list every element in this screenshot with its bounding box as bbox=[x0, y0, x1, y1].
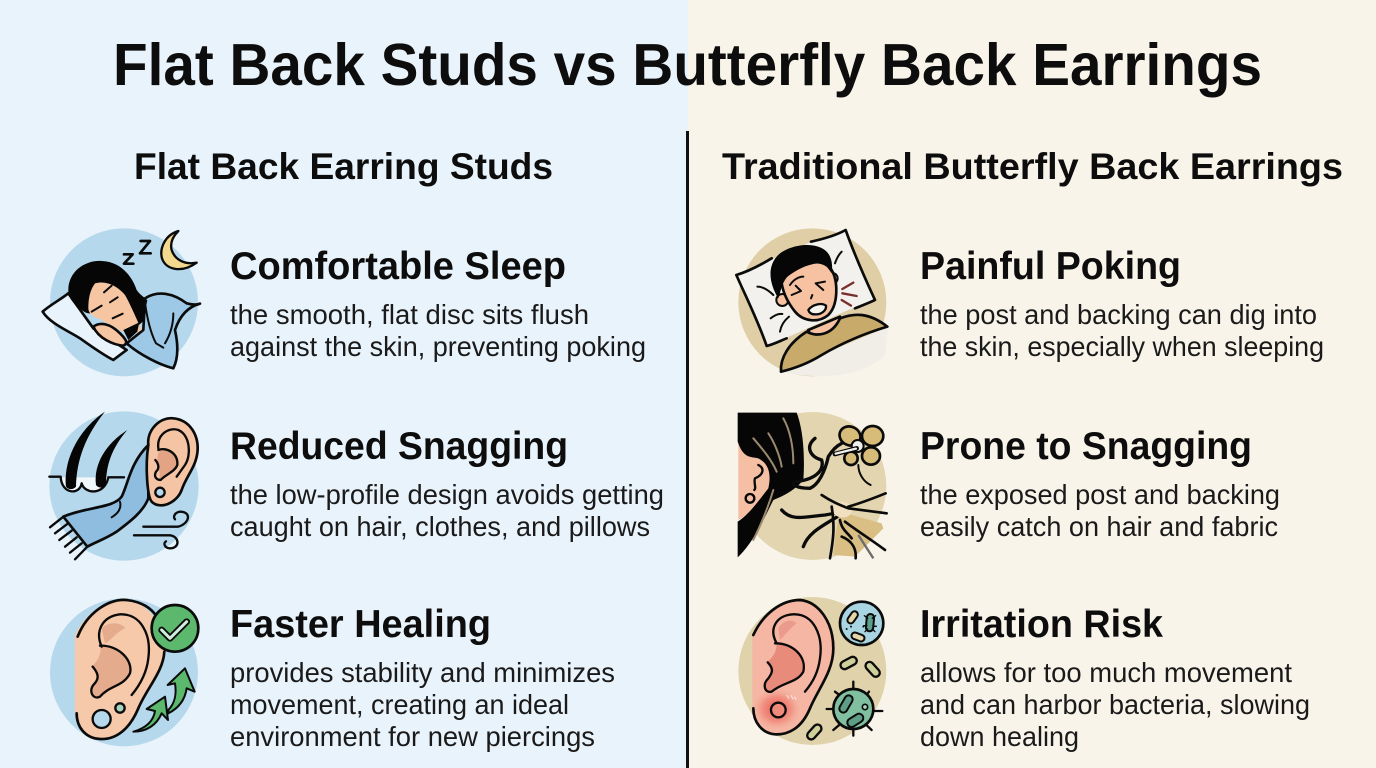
icon: sleeping person with moon bbox=[43, 228, 200, 376]
heading: prone to snagging: Prone to Snagging bbox=[920, 425, 1252, 468]
description: reduced snagging bbox=[230, 479, 664, 542]
description: irritation risk: down healing bbox=[920, 721, 1079, 752]
panel: comfortable sleep bbox=[43, 228, 646, 376]
icon: hair caught on butterfly back bbox=[738, 412, 887, 560]
heading: irritation risk: Irritation Risk bbox=[920, 603, 1163, 646]
panel: reduced snagging bbox=[49, 411, 664, 561]
heading: comfortable sleep: Comfortable Sleep bbox=[230, 245, 566, 288]
butterfly back bbox=[835, 423, 883, 465]
icon: man in pain on pillow bbox=[736, 228, 888, 376]
description: prone to snagging bbox=[920, 479, 1280, 542]
description: faster healing bbox=[230, 657, 615, 752]
description: comfortable sleep bbox=[230, 299, 646, 362]
heading: faster healing: Faster Healing bbox=[230, 603, 491, 646]
left column heading: Flat Back Earring Studs bbox=[134, 146, 553, 187]
panel: left background bbox=[0, 0, 688, 768]
description: prone to snagging: the exposed post and backing bbox=[920, 479, 1280, 510]
center divider bbox=[686, 131, 689, 768]
description: faster healing: provides stability and minimizes bbox=[230, 657, 615, 688]
panel: faster healing bbox=[50, 598, 615, 752]
title: Flat Back Studs vs Butterfly Back Earrings bbox=[113, 32, 1262, 98]
description: prone to snagging: easily catch on hair and fabric bbox=[920, 511, 1278, 542]
description: painful poking bbox=[920, 299, 1324, 362]
panel: right background bbox=[688, 0, 1376, 768]
description: faster healing: environment for new piercings bbox=[230, 721, 595, 752]
description: faster healing: movement, creating an ideal bbox=[230, 689, 569, 720]
description: irritation risk: and can harbor bacteria, slowing bbox=[920, 689, 1310, 720]
description: painful poking: the skin, especially when sleeping bbox=[920, 331, 1324, 362]
heading: painful poking: Painful Poking bbox=[920, 245, 1181, 288]
description: irritation risk: allows for too much movement bbox=[920, 657, 1292, 688]
description: reduced snagging: the low-profile design avoids getting bbox=[230, 479, 664, 510]
description: reduced snagging: caught on hair, clothes, and pillows bbox=[230, 511, 650, 542]
icon: ear, hair and scarf bbox=[49, 411, 199, 561]
heading: reduced snagging: Reduced Snagging bbox=[230, 425, 568, 468]
description: irritation risk bbox=[920, 657, 1310, 752]
icon: irritated ear with bacteria bbox=[738, 597, 886, 745]
panel: painful poking bbox=[736, 228, 1324, 376]
panel: prone to snagging bbox=[738, 412, 1280, 560]
right column heading: Traditional Butterfly Back Earrings bbox=[722, 146, 1343, 187]
description: comfortable sleep: against the skin, preventing poking bbox=[230, 331, 646, 362]
description: painful poking: the post and backing can dig into bbox=[920, 299, 1317, 330]
icon: healing ear with check and arrows bbox=[50, 598, 198, 746]
panel: irritation risk bbox=[738, 597, 1310, 752]
description: comfortable sleep: the smooth, flat disc sits flush bbox=[230, 299, 589, 330]
